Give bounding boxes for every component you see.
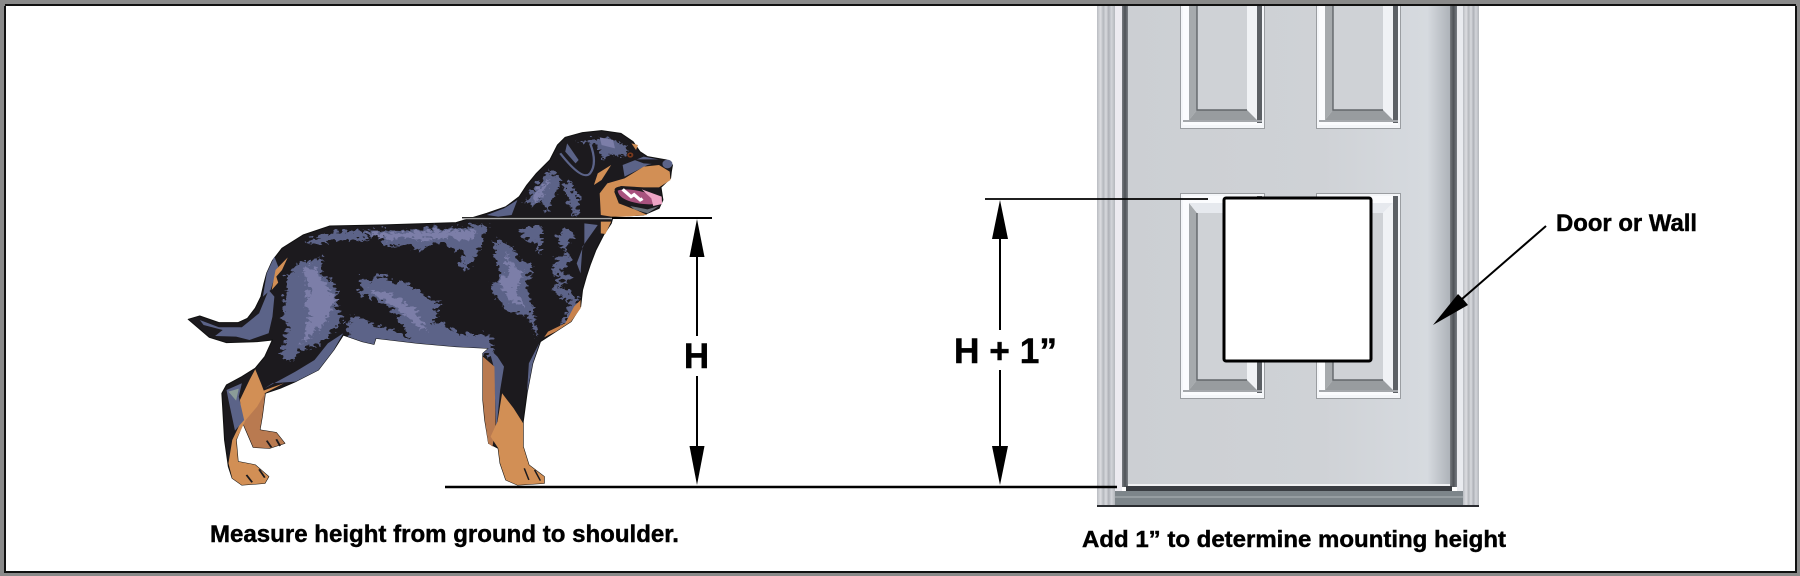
door slab — [1128, 6, 1450, 486]
caption: add one inch: Add 1” to determine mounting height — [1082, 526, 1506, 552]
fur: belly — [345, 273, 489, 353]
fur: rump edge — [263, 257, 278, 297]
door threshold — [1097, 484, 1479, 507]
dog mouth and tongue — [615, 186, 662, 213]
rottweiler dog illustration — [188, 131, 672, 485]
fur: neck base — [487, 200, 517, 217]
tan: hip spot — [272, 257, 288, 290]
fur: throat — [577, 223, 598, 273]
shoulder measurement line — [462, 217, 712, 220]
pet door opening — [1224, 198, 1371, 361]
H dimension arrow — [690, 219, 704, 485]
door illustration — [1097, 0, 1479, 507]
tan: throat — [601, 222, 611, 234]
ground line — [445, 486, 1117, 488]
upper door panels — [1180, 0, 1400, 128]
tan: rear legs — [227, 369, 285, 485]
left door jamb — [1097, 6, 1128, 507]
dog head — [560, 137, 672, 217]
right door jamb — [1450, 6, 1479, 507]
caption: measure height: Measure height from ground to shoulder. — [210, 521, 679, 548]
fur: tail — [200, 290, 274, 340]
fur: shoulder — [486, 237, 533, 336]
fur: hip and thigh — [277, 253, 341, 357]
fur: jagged markings clipped to the body — [277, 133, 623, 357]
tan: front legs — [483, 357, 544, 485]
fur: front leg edge — [527, 343, 540, 393]
fur: front leg — [489, 348, 504, 430]
fur: thigh lower edge — [265, 333, 343, 388]
H + 1 inch dimension arrow — [992, 200, 1008, 485]
dog body silhouette — [188, 131, 672, 485]
label: door or wall: Door or Wall — [1556, 211, 1697, 237]
label: H: H — [684, 337, 709, 376]
fur: neck stripes — [521, 165, 558, 210]
fur: back stripe — [301, 221, 485, 268]
arrow to door — [1433, 226, 1546, 325]
label: H + 1 inch: H + 1” — [954, 332, 1057, 371]
lower door panels — [1180, 194, 1400, 398]
tan: chest — [544, 300, 581, 337]
mounting height top line — [985, 198, 1208, 200]
